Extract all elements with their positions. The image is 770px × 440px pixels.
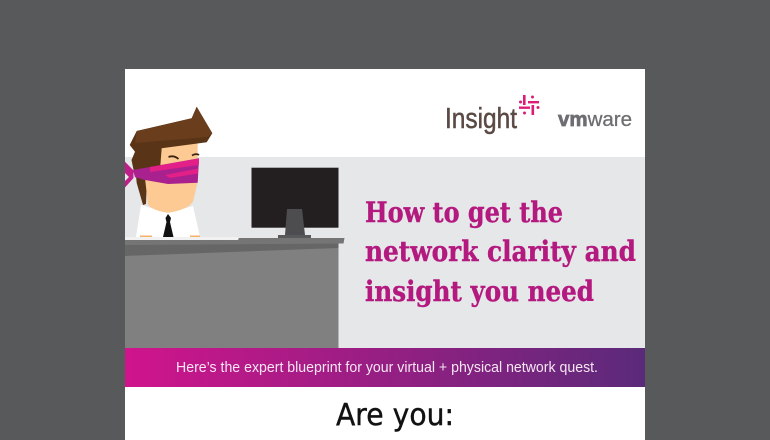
title [365, 196, 636, 308]
shirt [136, 205, 200, 237]
title: How to get the [365, 196, 563, 229]
eyebrows [168, 154, 199, 159]
blindfold [133, 158, 199, 184]
banner [125, 348, 645, 387]
necktie [163, 214, 174, 237]
heading: Are you: Are you: [336, 398, 454, 433]
desk shadow [125, 243, 338, 256]
desk top [125, 238, 344, 245]
keyboard [125, 237, 238, 240]
face [145, 143, 198, 213]
screen [252, 168, 338, 228]
logo: vmware: vmware [558, 109, 632, 131]
hair highlight [135, 107, 212, 143]
banner text: Here’s the expert blueprint for your virtual + physical network quest. [176, 359, 598, 376]
base [278, 235, 311, 238]
title: insight you need [365, 275, 594, 308]
stand [285, 209, 305, 235]
panel: grey hero band [125, 157, 645, 348]
desk front [125, 243, 338, 348]
panel: white card [125, 69, 645, 440]
desk [125, 237, 344, 348]
cuffs [140, 236, 200, 238]
logo: Insight: Insight [445, 103, 517, 135]
monitor [252, 168, 338, 238]
hair [130, 107, 212, 172]
lower hair [136, 176, 147, 205]
title: network clarity and [365, 235, 636, 268]
blindfold knot [125, 162, 134, 188]
icon: Insight hash mark [519, 95, 540, 115]
blindfold stripes [150, 158, 199, 178]
illustration: blindfolded man [125, 107, 212, 238]
